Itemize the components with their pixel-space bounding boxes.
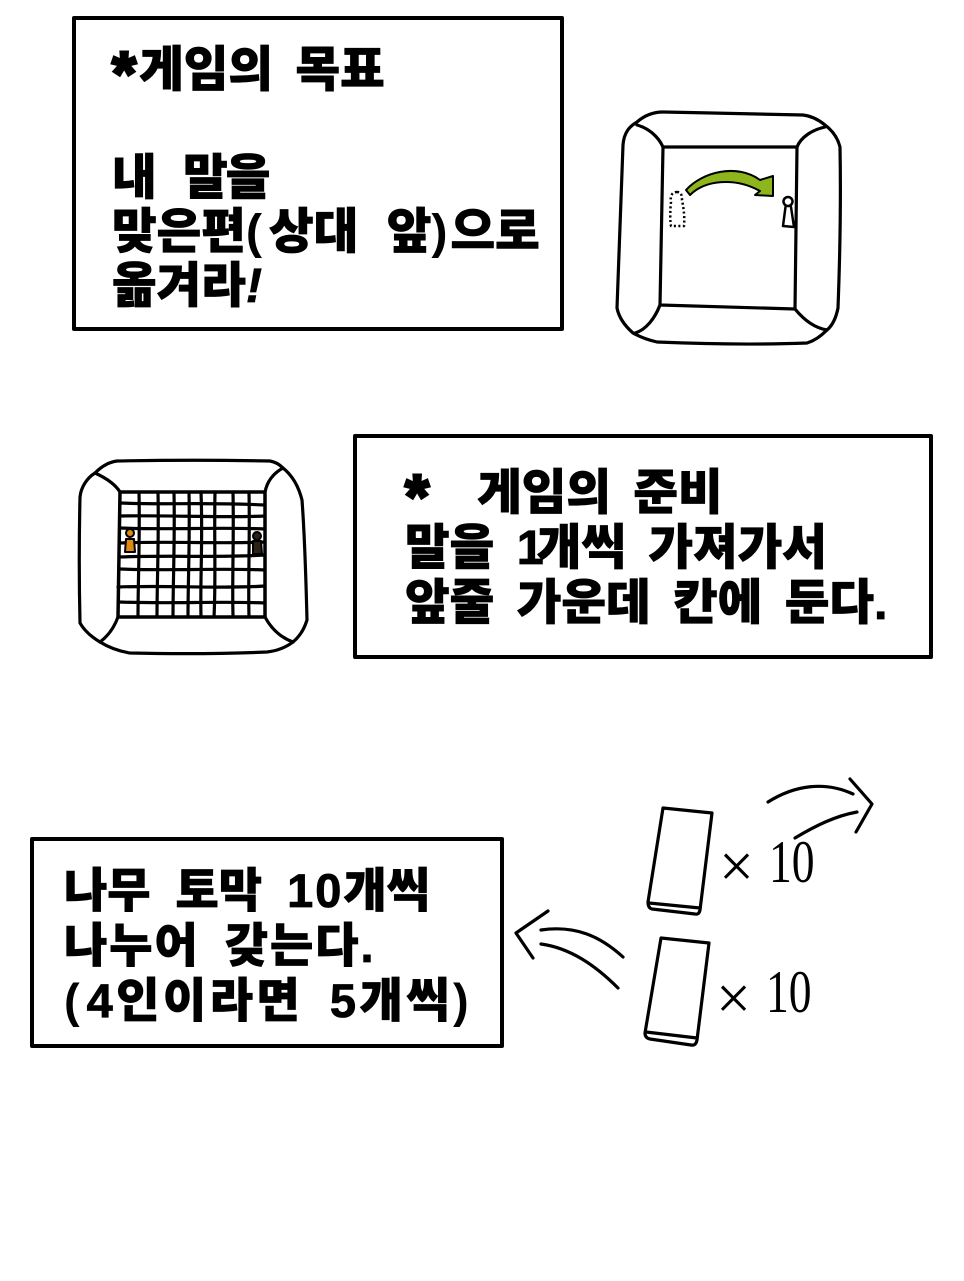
- arrow: upper curved arrow: [768, 779, 872, 838]
- text: blocks description: 나무 토막 10개씩 나누어 갖는다. (4인이라면 5개씩): [64, 864, 476, 1027]
- text: upper count: 10: [769, 829, 815, 896]
- icon: upper wood block: [648, 808, 712, 914]
- text: lower count: ×: [716, 965, 751, 1033]
- panel: game setup: [353, 434, 933, 659]
- text: lower count: [716, 959, 812, 1033]
- panel: game goal: [72, 16, 564, 331]
- arrow: lower curved arrow: [516, 911, 623, 988]
- text: goal description: 내 말을 맞은편(상대 앞)으로 옮겨라!: [112, 151, 540, 313]
- text: upper count: [719, 829, 815, 901]
- icon: orange piece: [125, 529, 135, 552]
- text: lower count: 10: [766, 959, 812, 1026]
- arrow: green move arrow: [686, 171, 773, 196]
- panel: wood blocks: [30, 837, 504, 1048]
- board: movement diagram: [617, 112, 840, 344]
- heading: game goal: *게임의 목표: [112, 40, 385, 109]
- icon: dotted origin piece: [670, 192, 684, 226]
- text: upper count: ×: [719, 833, 754, 901]
- icon: lower wood block: [645, 938, 709, 1045]
- icon: dark piece: [253, 532, 262, 554]
- icon: destination piece: [783, 197, 794, 227]
- board: setup grid: [79, 460, 307, 654]
- text: setup description: * 게임의 준비 말을 1개씩 가져가서 앞줄 가운데 칸에 둔다.: [405, 463, 887, 630]
